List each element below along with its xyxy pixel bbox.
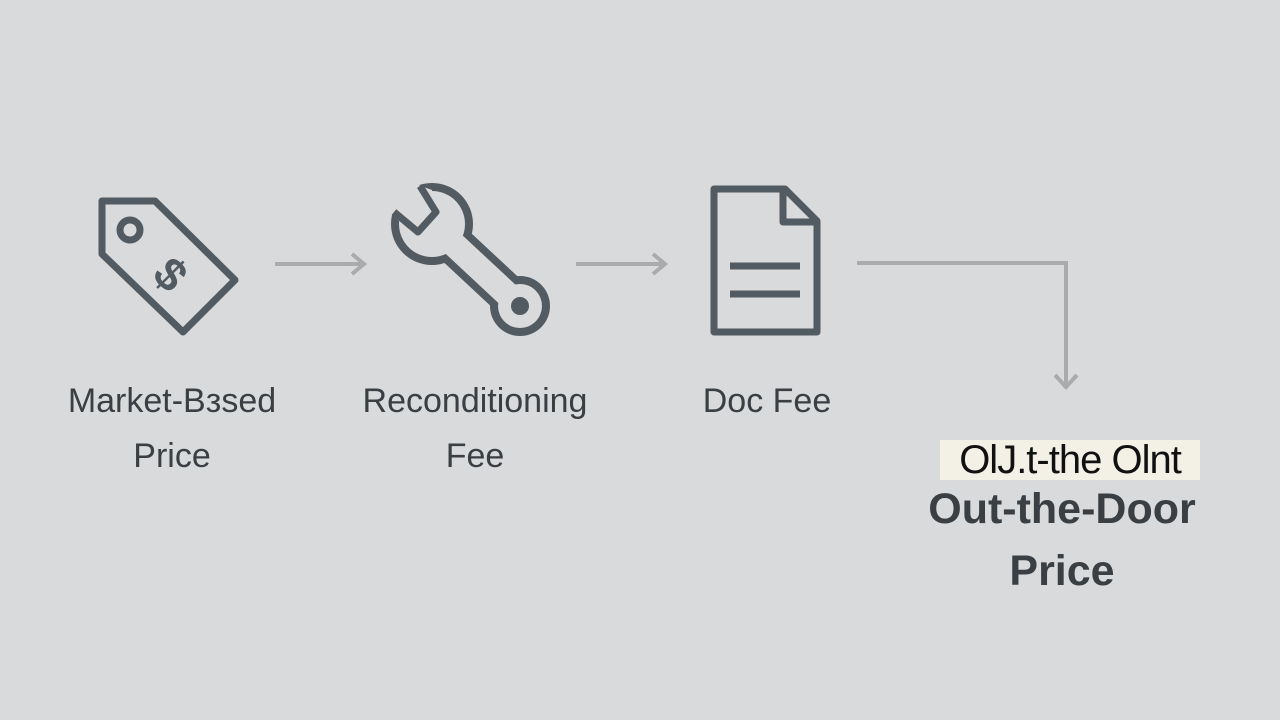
arrow 2 xyxy=(576,254,665,274)
icon: wrench xyxy=(388,182,550,336)
label: doc fee: Doc Fee xyxy=(703,382,831,420)
label: reconditioning fee: Reconditioning xyxy=(363,382,587,420)
icon: price tag xyxy=(102,201,235,332)
highlighted garbled label: OlJ.t-the Olnt xyxy=(959,438,1181,482)
arrow 1 xyxy=(275,254,364,274)
icon: price tag: $ xyxy=(143,247,198,302)
label: reconditioning fee xyxy=(363,382,587,475)
label: out-the-door price xyxy=(928,485,1196,595)
label: out-the-door price: Price xyxy=(1009,547,1115,595)
icon: document xyxy=(714,189,817,332)
label: market-based price xyxy=(68,382,276,475)
arrow 3 xyxy=(857,263,1077,387)
label: market-based price: Market-Bзsed xyxy=(68,382,276,420)
label: out-the-door price: Out-the-Door xyxy=(928,485,1196,533)
label: market-based price: Price xyxy=(133,437,211,475)
label: reconditioning fee: Fee xyxy=(446,437,504,475)
